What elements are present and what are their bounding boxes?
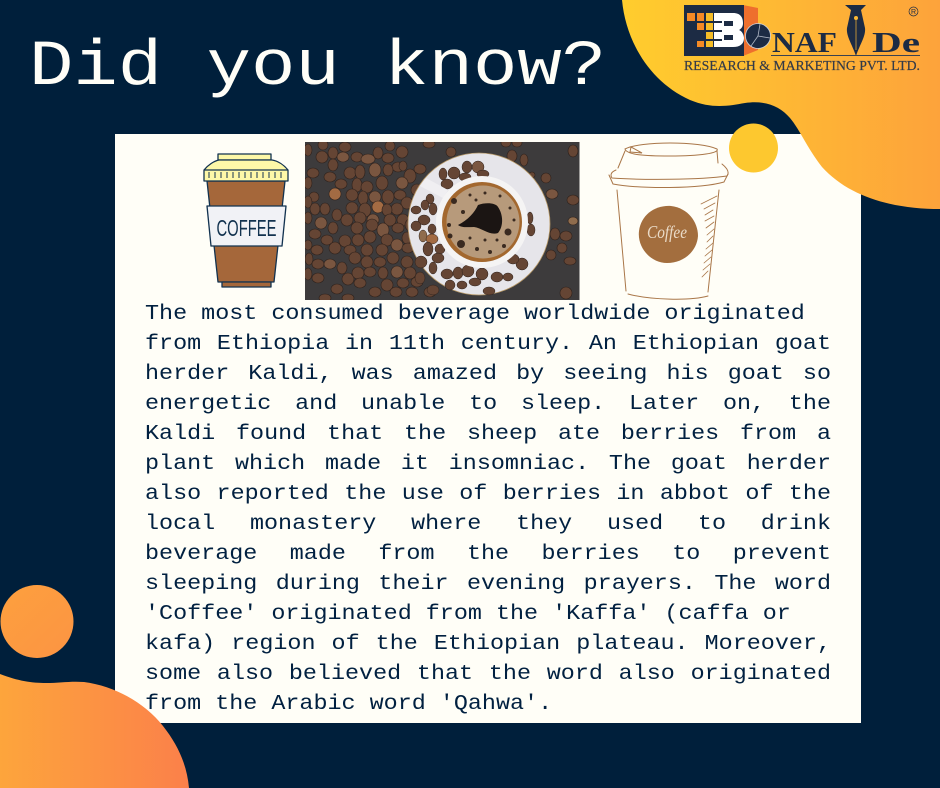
- body text: plant which made it insomniac. The goat herder: [145, 453, 831, 476]
- body text: from Ethiopia in 11th century. An Ethiopian goat: [145, 333, 831, 356]
- registered mark: [909, 7, 918, 16]
- panel: content card: [115, 134, 861, 723]
- logo mark: [684, 5, 770, 56]
- body text: Kaldi found that the sheep ate berries from a: [145, 423, 831, 446]
- body text: beverage made from the berries to prevent: [145, 543, 831, 566]
- registered mark: R: [911, 9, 916, 16]
- body text: local monastery where they used to drink: [145, 513, 831, 536]
- cup rim: [436, 176, 528, 268]
- body text: 'Coffee' originated from the 'Kaffa' (caffa or: [145, 603, 791, 626]
- logo word: NAF: [772, 27, 837, 59]
- logo rule: [771, 54, 920, 56]
- circle: orange accent: [0, 585, 74, 658]
- icon: sketched takeaway cup: [609, 143, 728, 299]
- icon: coffee cup with sleeve: [204, 154, 288, 287]
- body text: [145, 303, 831, 716]
- logo: Bonafide: [684, 5, 920, 74]
- coffee centre: [458, 203, 502, 234]
- saucer: [408, 153, 550, 295]
- logo: Bonafide: De: [872, 27, 920, 59]
- cup handle: [420, 178, 448, 198]
- body text: kafa) region of the Ethiopian plateau. Moreover,: [145, 633, 831, 656]
- body text: herder Kaldi, was amazed by seeing his goat so: [145, 363, 831, 386]
- body text: The most consumed beverage worldwide originated: [145, 303, 805, 326]
- sleeve text: COFFEE: [216, 215, 276, 241]
- cup logo text: Coffee: [647, 222, 687, 242]
- photo: coffee cup and beans: [304, 139, 580, 302]
- cup logo blob: [639, 206, 698, 263]
- body text: from the Arabic word 'Qahwa'.: [145, 693, 552, 716]
- blob: bottom left: [0, 674, 189, 788]
- body text: some also believed that the word also originated: [145, 663, 831, 686]
- coffee surface: [442, 182, 522, 262]
- logo tagline: RESEARCH & MARKETING PVT. LTD.: [684, 59, 920, 74]
- blob: top right: [622, 0, 940, 209]
- logo pen nib: [845, 5, 866, 56]
- title: Did you know?: [29, 32, 606, 104]
- body text: also reported the use of berries in abbot of the: [145, 483, 831, 506]
- body text: sleeping during their evening prayers. The word: [145, 573, 831, 596]
- body text: energetic and unable to sleep. Later on, the: [145, 393, 831, 416]
- circle: yellow accent: [729, 124, 778, 172]
